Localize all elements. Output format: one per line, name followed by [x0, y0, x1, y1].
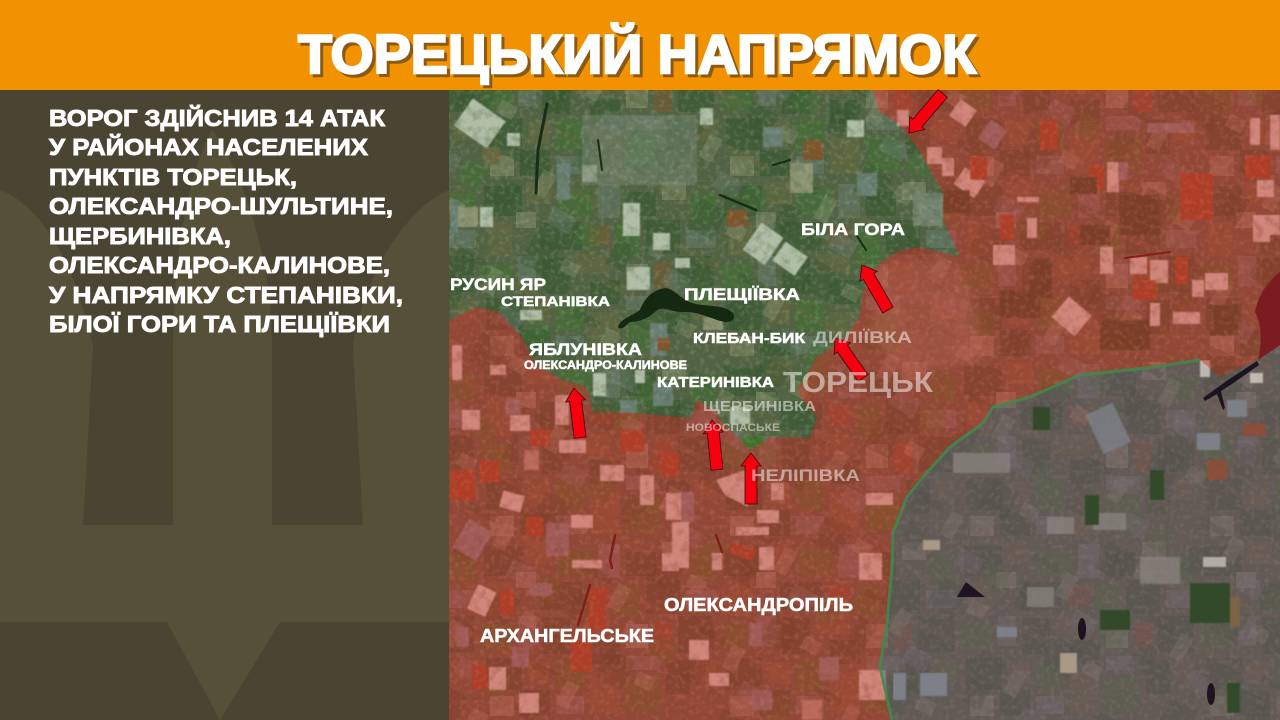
text block: attack summary: У НАПРЯМКУ СТЕПАНІВКИ,: [49, 282, 403, 308]
text block: attack summary: ПУНКТІВ ТОРЕЦЬК,: [49, 164, 297, 190]
lighter ground east of front: [870, 255, 985, 375]
label: Toretsk: ТОРЕЦЬК: [783, 367, 933, 399]
noise texture: [449, 90, 1280, 720]
arrow: Shcherbynivka attack: [741, 453, 761, 504]
label: Oleksandro-Kalynove: ОЛЕКСАНДРО-КАЛИНОВЕ: [524, 360, 687, 372]
text block: attack summary: [49, 104, 403, 337]
text block: attack summary: ОЛЕКСАНДРО-ШУЛЬТИНЕ,: [49, 193, 393, 219]
label: Yablunivka: ЯБЛУНІВКА: [529, 340, 642, 359]
arrow: north-east attack: [901, 87, 950, 139]
text block: attack summary: У РАЙОНАХ НАСЕЛЕНИХ: [49, 133, 369, 160]
label: Oleksandropil: ОЛЕКСАНДРОПІЛЬ: [664, 595, 853, 615]
ponds in gray region: [957, 361, 1259, 705]
front line between red and gray: [880, 360, 1200, 720]
text block: attack summary: ОЛЕКСАНДРО-КАЛИНОВЕ,: [49, 252, 390, 278]
icon: trident watermark: [0, 130, 449, 720]
dark reservoir at right edge: [1255, 272, 1280, 360]
label: Nelipivka: НЕЛІПІВКА: [751, 466, 860, 485]
label: Bila Hora: БІЛА ГОРА: [801, 220, 905, 239]
label: Arkhanhelske: АРХАНГЕЛЬСЬКЕ: [480, 626, 654, 646]
label: Novospaske: НОВОСПАСЬКЕ: [686, 422, 780, 434]
map: satellite front-line map: [449, 90, 1280, 720]
label: Stepanivka: СТЕПАНІВКА: [501, 293, 610, 309]
gray neutral tint: [880, 345, 1280, 720]
red occupied-territory tint: [449, 90, 1280, 720]
label: Rusyn Yar: РУСИН ЯР: [450, 275, 546, 294]
label: Dyliivka: ДИЛІЇВКА: [813, 328, 912, 347]
green controlled-territory tint: [449, 90, 960, 450]
text block: attack summary: ЩЕРБИНІВКА,: [49, 223, 231, 249]
satellite imagery fields: [450, 98, 1280, 720]
lake near Pleshchiivka: [618, 288, 734, 328]
label: Pleshchiivka: ПЛЕЩІЇВКА: [684, 285, 800, 304]
title text: ТОРЕЦЬКИЙ НАПРЯМОК: [298, 22, 976, 85]
arrow: Oleksandro-Kalynove attack: [564, 387, 590, 439]
text block: attack summary: БІЛОЇ ГОРИ ТА ПЛЕЩІЇВКИ: [49, 311, 390, 337]
field patchwork texture: [449, 90, 1280, 720]
gray region detail: [893, 360, 1266, 713]
label: Katerynivka: КАТЕРИНІВКА: [657, 374, 774, 391]
arrow: Bila Hora attack: [853, 260, 897, 315]
label: Kleban-Byk: КЛЕБАН-БИК: [693, 330, 806, 347]
label: Shcherbynivka: ЩЕРБИНІВКА: [703, 398, 816, 415]
arrow: Novospaske attack: [702, 419, 727, 471]
text block: attack summary: ВОРОГ ЗДІЙСНИВ 14 АТАК: [49, 104, 386, 131]
title banner: [0, 0, 1280, 90]
title text shadow: ТОРЕЦЬКИЙ НАПРЯМОК: [301, 25, 979, 88]
map labels: [450, 220, 933, 646]
panel: left information panel: [0, 90, 449, 720]
arrow: Dyliivka attack: [827, 332, 871, 384]
water bodies: [536, 104, 1170, 625]
